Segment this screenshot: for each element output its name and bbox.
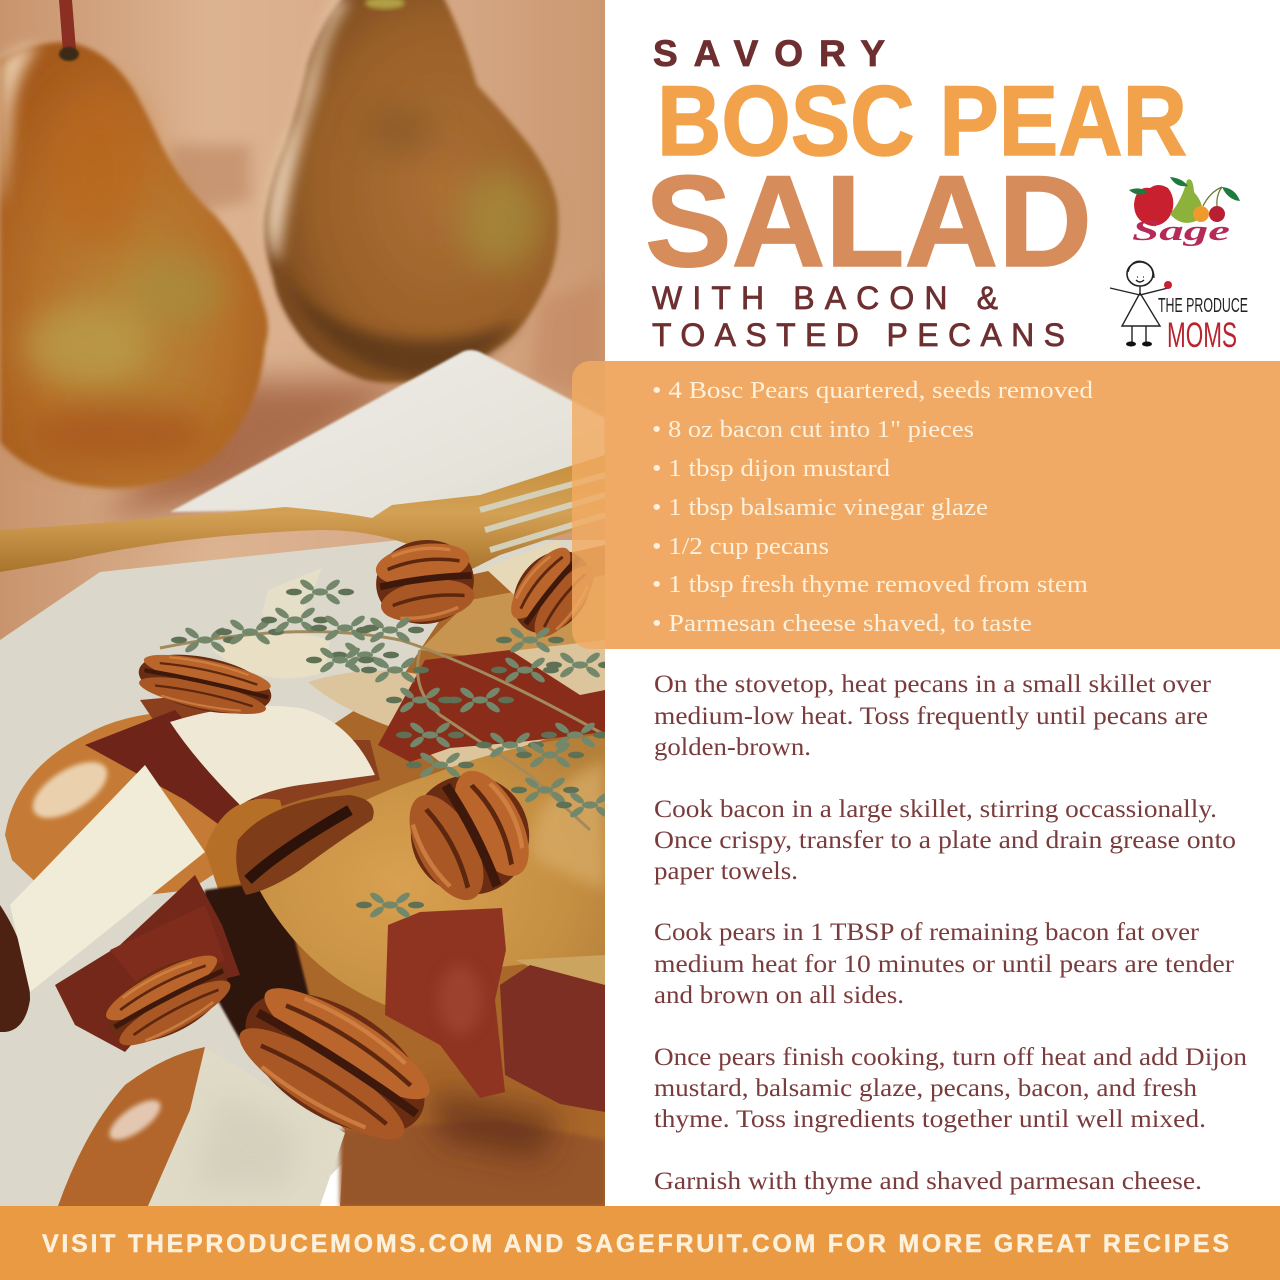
logo: The Produce Moms <box>1110 261 1248 355</box>
ingredient list: • 1 tbsp fresh thyme removed from stem <box>652 572 1088 598</box>
footer banner <box>0 1206 1280 1280</box>
step one <box>654 671 1212 761</box>
subtitle line two: TOASTED PECANS <box>652 317 1065 353</box>
ingredient list: • 4 Bosc Pears quartered, seeds removed <box>652 378 1093 404</box>
step five: Garnish with thyme and shaved parmesan cheese. <box>654 1168 1202 1195</box>
white column <box>605 0 1280 361</box>
step two <box>654 796 1236 885</box>
ingredient list: • 1/2 cup pecans <box>652 534 829 560</box>
photo: pears, plate and salad <box>0 0 624 1206</box>
bacon pieces <box>0 650 605 1112</box>
ingredient list: • 8 oz bacon cut into 1" pieces <box>652 417 974 443</box>
parmesan shavings <box>10 540 560 1206</box>
pear slice bottom <box>58 1047 205 1206</box>
ingredient list: • 1 tbsp balsamic vinegar glaze <box>652 495 988 521</box>
fork <box>0 455 605 572</box>
ingredients panel <box>572 0 1280 1206</box>
food base: sauce and pear slices <box>5 545 605 1206</box>
title: savory: SAVORY <box>653 33 885 74</box>
title: salad: SALAD <box>645 148 1092 294</box>
ingredient list: • Parmesan cheese shaved, to taste <box>652 611 1032 637</box>
ingredient list <box>652 378 1093 637</box>
logo: Sage fruit: Sage <box>1132 216 1230 247</box>
recipe instructions <box>654 671 1248 1195</box>
step two: Cook bacon in a large skillet, stirring occassionally. <box>654 796 1217 823</box>
step one: On the stovetop, heat pecans in a small skillet over <box>654 671 1212 698</box>
pear: front left with stem <box>0 0 268 488</box>
thyme sprigs <box>160 578 624 919</box>
step three <box>654 919 1235 1009</box>
title: bosc pear: BOSC PEAR <box>657 65 1187 176</box>
step two: Once crispy, transfer to a plate and drain grease onto <box>654 827 1236 854</box>
pear: back right <box>264 0 558 383</box>
step four <box>654 1044 1248 1133</box>
logo: Sage fruit <box>1129 177 1240 247</box>
step three: and brown on all sides. <box>654 982 904 1009</box>
subtitle line one: WITH BACON & <box>652 280 998 316</box>
pecans <box>95 534 607 1162</box>
step four: thyme. Toss ingredients together until well mixed. <box>654 1106 1206 1133</box>
step three: Cook pears in 1 TBSP of remaining bacon fat over <box>654 919 1200 946</box>
wood table background <box>0 0 605 640</box>
title block <box>645 33 1187 353</box>
step four: mustard, balsamic glaze, pecans, bacon, and fresh <box>654 1075 1198 1102</box>
step two: paper towels. <box>654 858 798 885</box>
orange ingredients band <box>605 361 1280 649</box>
logo: The Produce Moms: MOMS <box>1167 316 1237 355</box>
step four: Once pears finish cooking, turn off heat and add Dijon <box>654 1044 1248 1071</box>
step one: golden-brown. <box>654 734 811 761</box>
step one: medium-low heat. Toss frequently until pecans are <box>654 703 1208 730</box>
translucent tab over photo <box>572 361 632 649</box>
ingredient list: • 1 tbsp dijon mustard <box>652 456 890 482</box>
step three: medium heat for 10 minutes or until pears are tender <box>654 951 1235 978</box>
footer text: VISIT THEPRODUCEMOMS.COM AND SAGEFRUIT.COM FOR MORE GREAT RECIPES <box>42 1230 1229 1258</box>
plate <box>0 350 605 1206</box>
